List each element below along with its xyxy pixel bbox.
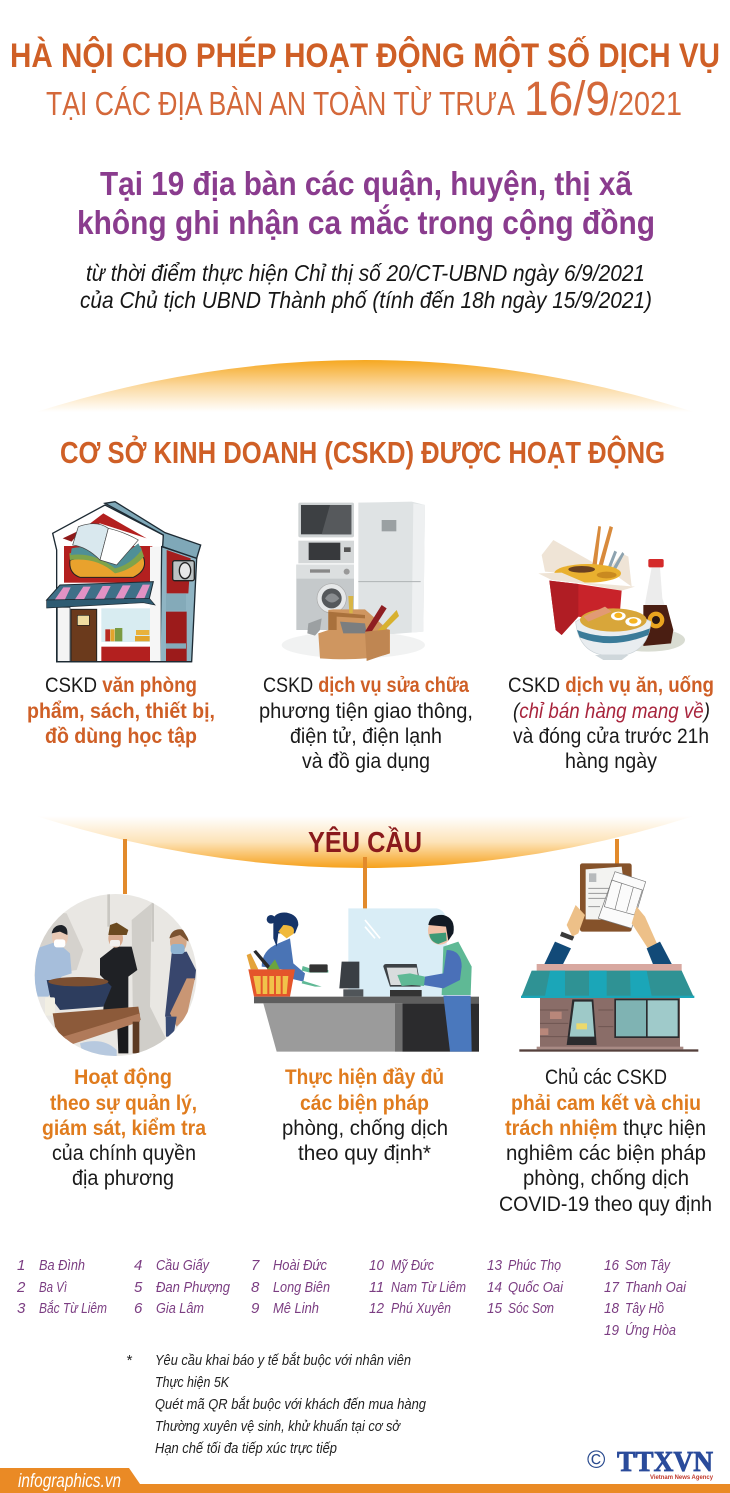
caption: supervision: giám sát, kiểm tra [42, 1117, 206, 1140]
caption: stationery: CSKD văn phòng [45, 674, 197, 697]
list: 19 districts: Sơn Tây [625, 1257, 671, 1274]
caption: food and drink: và đóng cửa trước 21h [513, 725, 709, 748]
caption: repair: điện tử, điện lạnh [290, 725, 442, 748]
arc: top banner [36, 360, 694, 412]
caption: supervision: địa phương [72, 1167, 174, 1190]
subtitle: không ghi nhận ca mắc trong cộng đồng [77, 204, 655, 241]
list: 19 districts: Tây Hồ [625, 1300, 664, 1317]
list: 19 districts: Cầu Giấy [156, 1257, 210, 1274]
list: 19 districts: Thanh Oai [625, 1279, 687, 1296]
list: 19 districts: 4 [134, 1257, 142, 1274]
list: 19 districts: 16 [604, 1257, 620, 1274]
list: 19 districts: Gia Lâm [156, 1300, 204, 1317]
connector: left [123, 839, 127, 894]
list: 19 districts: Bắc Từ Liêm [39, 1300, 107, 1317]
caption: prevention measures [282, 1066, 448, 1165]
list: 19 districts: 1 [17, 1257, 25, 1274]
caption: owner commitment: COVID-19 theo quy định [499, 1193, 712, 1216]
list: 19 districts: 8 [251, 1279, 260, 1296]
caption: stationery: đồ dùng học tập [45, 725, 197, 748]
caption: stationery: phẩm, sách, thiết bị, [27, 700, 215, 723]
list: 19 districts: 13 [487, 1257, 503, 1274]
illustration: inspection team [33, 893, 200, 1057]
illustration: storefront with documents [519, 863, 698, 1052]
list: 19 districts: 5 [134, 1279, 143, 1296]
footnote: Yêu cầu khai báo y tế bắt buộc với nhân viên [155, 1352, 411, 1369]
list: 19 districts: Ba Vì [39, 1279, 67, 1296]
connector: center [363, 857, 367, 909]
heading: requirements: YÊU CẦU [308, 825, 422, 859]
footer band [0, 1468, 730, 1493]
caption: repair: CSKD dịch vụ sửa chữa [263, 674, 469, 697]
list: 19 districts: Phúc Thọ [508, 1257, 561, 1274]
list: 19 districts: Mỹ Đức [391, 1257, 434, 1274]
footnote: * [126, 1352, 133, 1369]
list: 19 districts: 15 [487, 1300, 503, 1317]
list: 19 districts: Nam Từ Liêm [391, 1279, 466, 1296]
list: 19 districts: 6 [134, 1300, 143, 1317]
list: 19 districts: 11 [369, 1279, 384, 1296]
caption: prevention measures: Thực hiện đầy đủ [285, 1066, 444, 1089]
caption: food and drink [508, 674, 714, 773]
subtitle: Tại 19 địa bàn các quận, huyện, thị xã [100, 165, 633, 202]
caption: supervision: của chính quyền [52, 1142, 196, 1165]
title [10, 36, 720, 126]
caption: owner commitment: phải cam kết và chịu [511, 1092, 701, 1115]
source note [80, 260, 652, 313]
title: /2021 [610, 85, 682, 122]
logo: TTXVN: TTXVN [617, 1447, 713, 1478]
caption: prevention measures: phòng, chống dịch [282, 1117, 448, 1140]
caption: supervision [42, 1066, 206, 1190]
list: 19 districts: Ba Đình [39, 1257, 85, 1274]
list: 19 districts [16, 1257, 687, 1339]
caption: repair: và đồ gia dụng [302, 750, 430, 773]
list: 19 districts: Hoài Đức [273, 1257, 327, 1274]
icon: takeaway food [538, 526, 685, 660]
caption: food and drink: CSKD dịch vụ ăn, uống [508, 674, 714, 697]
list: 19 districts: Đan Phượng [156, 1279, 231, 1296]
list: 19 districts: 12 [369, 1300, 385, 1317]
title: 16/9 [524, 73, 610, 126]
caption: supervision: Hoạt động [74, 1066, 172, 1089]
list: 19 districts: Quốc Oai [508, 1279, 564, 1296]
list: 19 districts: 10 [369, 1257, 385, 1274]
list: 19 districts: Ứng Hòa [625, 1322, 676, 1339]
caption: prevention measures: các biện pháp [300, 1092, 429, 1115]
list: 19 districts: Phú Xuyên [391, 1300, 451, 1317]
list: 19 districts: Mê Linh [273, 1300, 319, 1317]
caption: owner commitment: trách nhiệm thực hiện [505, 1117, 706, 1140]
logo: TTXVN: Vietnam News Agency [650, 1474, 713, 1481]
caption: owner commitment: nghiêm các biện pháp [506, 1142, 706, 1165]
footnote [126, 1352, 427, 1457]
subtitle [77, 165, 655, 241]
list: 19 districts: 2 [16, 1279, 26, 1296]
list: 19 districts: 7 [251, 1257, 260, 1274]
caption: repair: phương tiện giao thông, [259, 700, 473, 723]
caption: repair [259, 674, 473, 773]
list: 19 districts: Long Biên [273, 1279, 330, 1296]
logo: TTXVN: © [587, 1446, 606, 1474]
list: 19 districts: 17 [604, 1279, 620, 1296]
list: 19 districts: Sóc Sơn [508, 1300, 554, 1317]
caption: stationery [27, 674, 215, 748]
caption: prevention measures: theo quy định* [298, 1142, 431, 1165]
title: TẠI CÁC ĐỊA BÀN AN TOÀN TỪ TRƯA [46, 85, 515, 122]
list: 19 districts: 3 [17, 1300, 26, 1317]
illustration: checkout counter [247, 908, 479, 1052]
arc: requirements banner [36, 816, 694, 868]
logo: TTXVN [587, 1446, 713, 1481]
footer site name: infographics.vn [18, 1471, 121, 1492]
caption: owner commitment [499, 1066, 712, 1216]
connector: right [615, 839, 619, 869]
caption: food and drink: (chỉ bán hàng mang về) [513, 700, 710, 723]
footnote: Quét mã QR bắt buộc với khách đến mua hàng [155, 1396, 427, 1413]
source note: của Chủ tịch UBND Thành phố (tính đến 18h ngày 15/9/2021) [80, 287, 652, 313]
footnote: Thường xuyên vệ sinh, khử khuẩn tại cơ sở [155, 1418, 402, 1435]
list: 19 districts: 19 [604, 1322, 620, 1339]
source note: từ thời điểm thực hiện Chỉ thị số 20/CT-UBND ngày 6/9/2021 [86, 260, 645, 286]
caption: owner commitment: phòng, chống dịch [523, 1167, 689, 1190]
caption: owner commitment: Chủ các CSKD [545, 1066, 667, 1089]
list: 19 districts: 14 [487, 1279, 502, 1296]
footnote: Hạn chế tối đa tiếp xúc trực tiếp [155, 1440, 337, 1457]
list: 19 districts: 9 [251, 1300, 260, 1317]
icon: appliances and toolbox [282, 502, 425, 661]
list: 19 districts: 18 [604, 1300, 620, 1317]
icon: bookshop [47, 502, 201, 662]
footnote: Thực hiện 5K [155, 1374, 230, 1391]
caption: supervision: theo sự quản lý, [50, 1092, 197, 1115]
caption: food and drink: hàng ngày [565, 750, 657, 773]
